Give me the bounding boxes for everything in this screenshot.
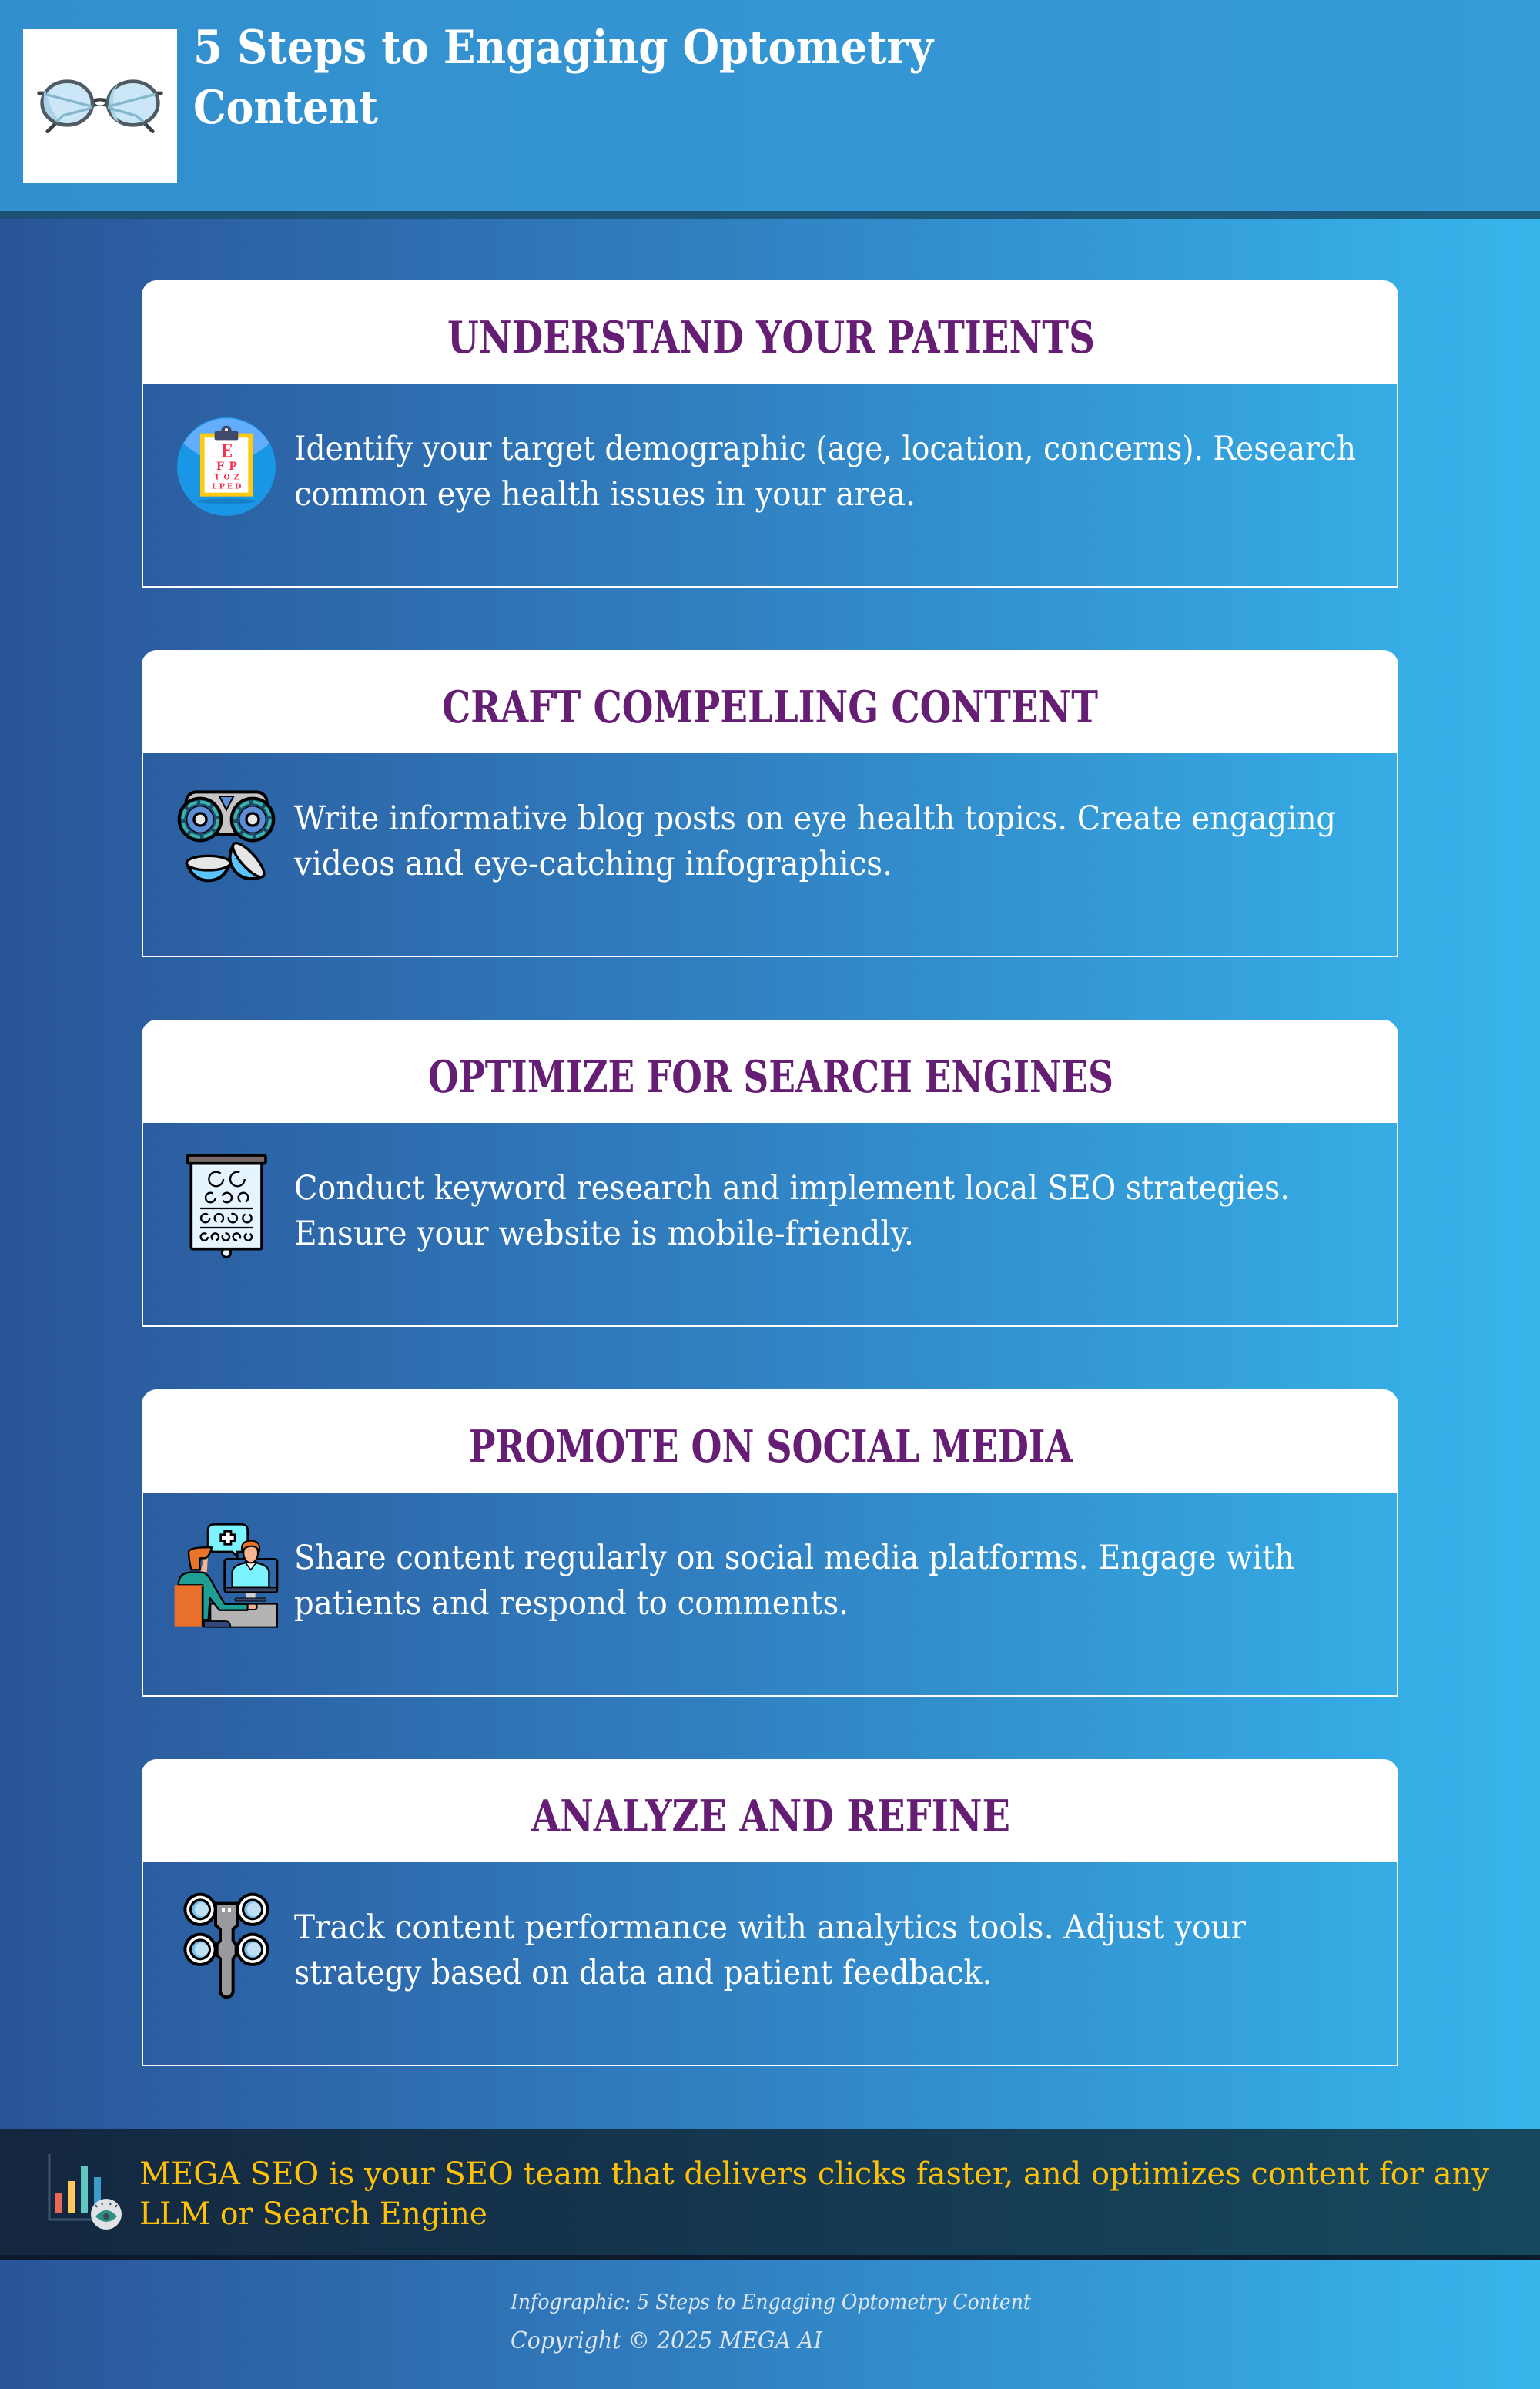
banner text [139,2156,1489,2232]
heading: ANALYZE AND REFINE [531,1791,1010,1842]
panel: promote on social media [142,1389,1398,1696]
footer text [510,2290,1031,2354]
body text [294,1908,1246,1992]
icon: telehealth consultation [175,1524,277,1627]
body text: Conduct keyword research and implement local SEO strategies. [294,1169,1290,1208]
heading: PROMOTE ON SOCIAL MEDIA [469,1421,1073,1473]
panel: optimize for search engines [142,1020,1398,1326]
heading: CRAFT COMPELLING CONTENT [442,682,1098,733]
footer text: Infographic: 5 Steps to Engaging Optometry Content [510,2290,1031,2314]
body text: Identify your target demographic (age, location, concerns). Research [294,430,1356,468]
body text [294,1539,1294,1623]
icon: eye chart clipboard [177,417,276,516]
title: Content [193,81,378,135]
title: 5 Steps to Engaging Optometry [193,21,935,75]
banner text: MEGA SEO is your SEO team that delivers clicks faster, and optimizes content for any [139,2156,1489,2192]
body text: Ensure your website is mobile-friendly. [294,1215,914,1253]
title [193,21,935,135]
panel: analyze and refine [142,1759,1398,2066]
body text: Write informative blog posts on eye health topics. Create engaging [294,799,1336,838]
body text: patients and respond to comments. [294,1584,849,1623]
heading: UNDERSTAND YOUR PATIENTS [447,312,1095,364]
banner text: LLM or Search Engine [139,2196,487,2232]
body text: Track content performance with analytics tools. Adjust your [294,1908,1246,1947]
banner: MEGA SEO promotion [0,2129,1540,2260]
icon: eye chart clipboard: E [221,440,233,462]
body text: videos and eye-catching infographics. [293,845,892,883]
header [0,0,1540,219]
footer text: Copyright © 2025 MEGA AI [511,2327,823,2354]
body text [294,430,1356,514]
body text: common eye health issues in your area. [294,475,916,514]
icon: eye chart roller [187,1155,266,1257]
icon: eye chart clipboard: F P [216,461,237,473]
body text [294,1169,1290,1253]
body text: strategy based on data and patient feedback. [294,1954,992,1992]
icon: phoropter and contact lenses [179,792,273,888]
icon: eye chart clipboard: T O Z [214,474,239,482]
logo: glasses [23,29,177,183]
body text: Share content regularly on social media platforms. Engage with [294,1539,1294,1577]
icon: chart with eye [49,2154,122,2230]
body text [293,799,1336,883]
panel: craft compelling content [142,650,1398,957]
heading: OPTIMIZE FOR SEARCH ENGINES [428,1051,1113,1103]
icon: trial lens tool [183,1893,270,1997]
panel: understand your patients [142,280,1398,587]
icon: eye chart clipboard: L P E D [212,483,241,491]
